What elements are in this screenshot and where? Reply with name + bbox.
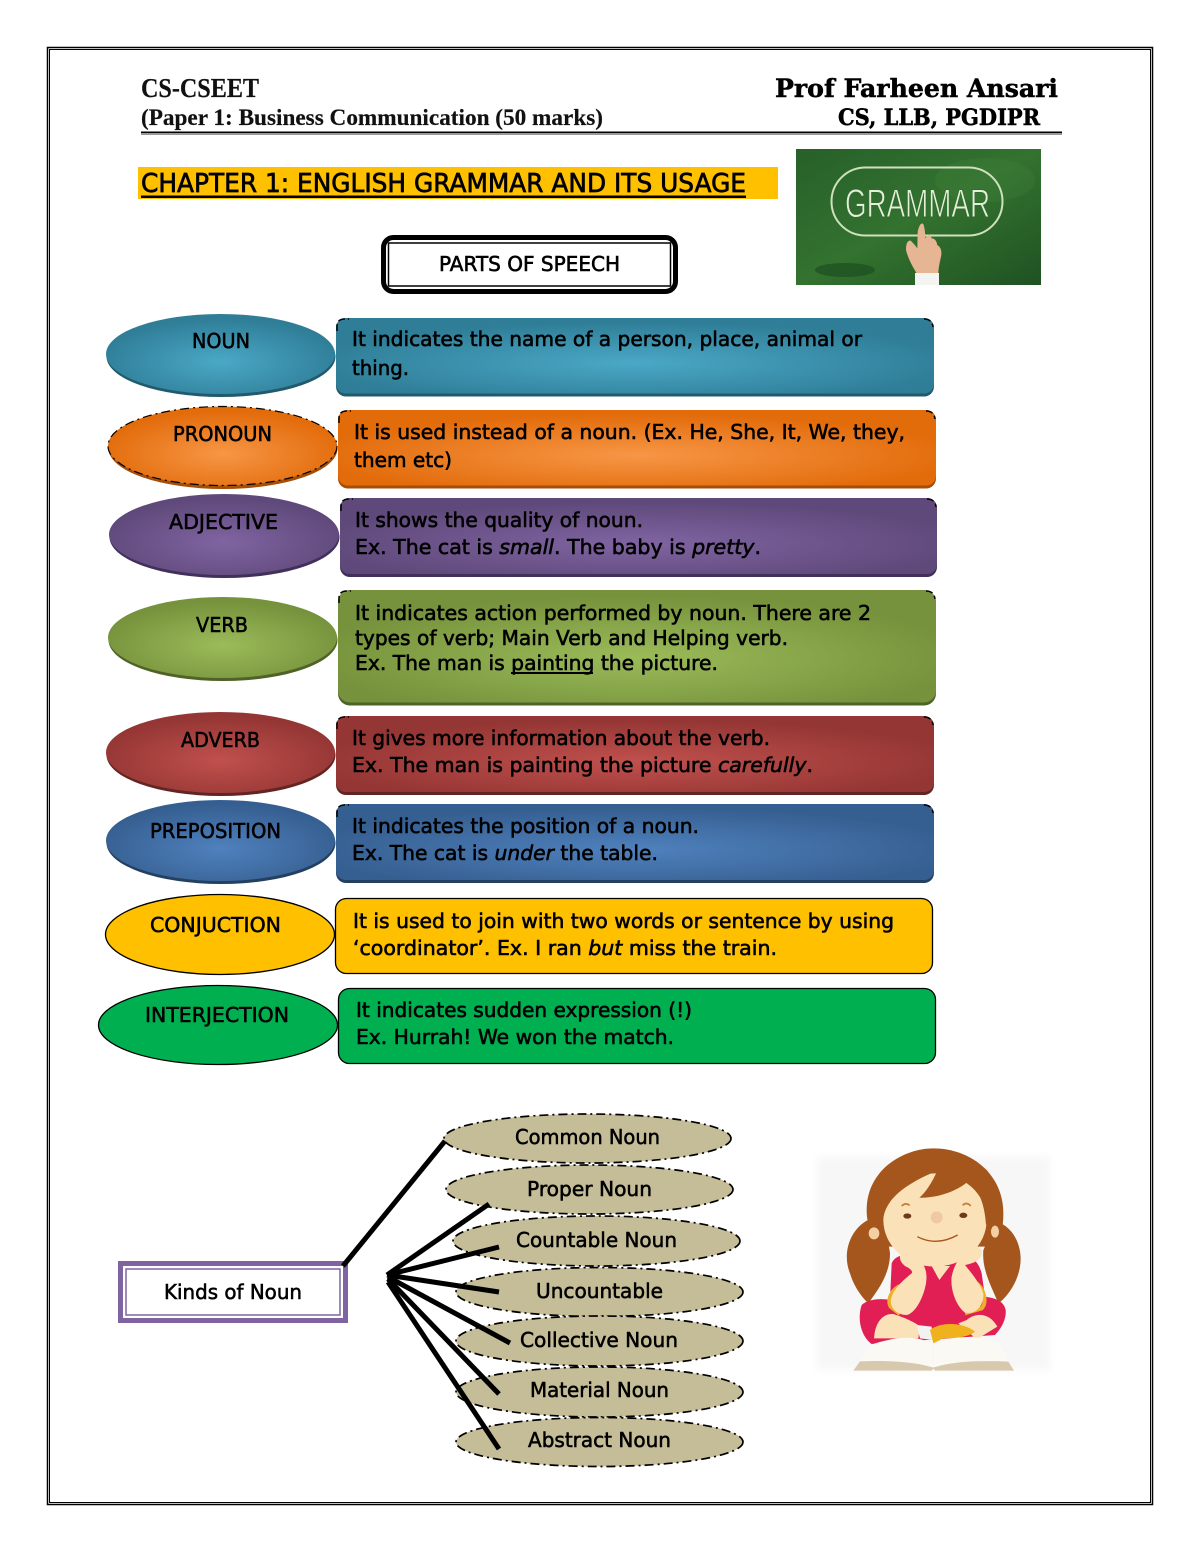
- verb definition: Ex. The man is painting the picture.: [355, 651, 718, 675]
- conjunction ellipse: CONJUCTION: [150, 913, 281, 937]
- adverb definition: It gives more information about the verb.: [352, 726, 770, 750]
- conjunction ellipse: [106, 894, 334, 974]
- adverb definition: [336, 716, 934, 795]
- noun type labels: Material Noun: [530, 1378, 669, 1402]
- noun type labels: Uncountable: [536, 1279, 663, 1303]
- noun type labels: Proper Noun: [527, 1177, 652, 1201]
- noun definition: [336, 318, 934, 396]
- preposition definition: [336, 804, 934, 883]
- noun type labels: Common Noun: [515, 1125, 660, 1149]
- heading: parts of speech: [384, 238, 676, 292]
- adjective ellipse: ADJECTIVE: [169, 510, 278, 534]
- header: course and paper: CS-CSEET: [141, 73, 259, 103]
- interjection definition: It indicates sudden expression (!): [356, 998, 692, 1022]
- box: kinds of noun: [118, 1261, 348, 1323]
- pronoun ellipse: PRONOUN: [173, 422, 272, 446]
- preposition ellipse: PREPOSITION: [150, 819, 281, 843]
- header: author: CS, LLB, PGDIPR: [838, 105, 1041, 131]
- adjective definition: It shows the quality of noun.: [355, 508, 643, 532]
- connector lines: [343, 1141, 510, 1449]
- diagram: kinds of noun: [118, 1114, 743, 1466]
- preposition ellipse: [106, 800, 336, 884]
- noun definition: thing.: [352, 356, 409, 380]
- adjective ellipse: [109, 494, 340, 578]
- adverb definition: Ex. The man is painting the picture carefully.: [352, 753, 813, 777]
- noun ellipse: [106, 314, 336, 397]
- header: author: [775, 74, 1058, 131]
- row: conjunction: [106, 894, 932, 974]
- pronoun ellipse: [108, 406, 338, 489]
- noun type ellipses: [444, 1114, 743, 1466]
- adjective definition: Ex. The cat is small. The baby is pretty.: [355, 535, 761, 559]
- verb ellipse: [108, 597, 338, 681]
- verb definition: It indicates action performed by noun. There are 2: [355, 601, 871, 625]
- chapter title: CHAPTER 1: ENGLISH GRAMMAR AND ITS USAGE: [141, 169, 746, 199]
- header: course and paper: (Paper 1: Business Communication (50 marks): [141, 105, 603, 130]
- row: noun: [106, 314, 934, 397]
- noun type labels: [515, 1125, 678, 1452]
- conjunction definition: [336, 898, 932, 974]
- image: girl reading a book: [817, 1148, 1050, 1371]
- preposition definition: Ex. The cat is under the table.: [352, 841, 658, 865]
- image: grammar chalkboard: GRAMMAR: [845, 182, 990, 226]
- noun type labels: Abstract Noun: [528, 1428, 671, 1452]
- row: verb: [108, 590, 936, 706]
- preposition definition: It indicates the position of a noun.: [352, 814, 699, 838]
- noun type labels: Countable Noun: [516, 1228, 677, 1252]
- interjection definition: Ex. Hurrah! We won the match.: [356, 1025, 674, 1049]
- row: adverb: [106, 712, 934, 796]
- pronoun definition: It is used instead of a noun. (Ex. He, She, It, We, they,: [354, 420, 905, 444]
- heading: parts of speech: PARTS OF SPEECH: [439, 252, 620, 276]
- interjection definition: [338, 988, 936, 1064]
- box: kinds of noun: Kinds of Noun: [164, 1280, 302, 1304]
- pronoun definition: [338, 410, 936, 488]
- pronoun definition: them etc): [354, 448, 452, 472]
- header: course and paper: [141, 73, 603, 130]
- verb ellipse: VERB: [196, 613, 248, 637]
- image: grammar chalkboard: [796, 149, 1041, 285]
- noun definition: It indicates the name of a person, place, animal or: [352, 327, 863, 351]
- header: author: Prof Farheen Ansari: [775, 74, 1058, 103]
- noun type labels: Collective Noun: [520, 1328, 678, 1352]
- conjunction definition: ‘coordinator’. Ex. I ran but miss the train.: [353, 936, 777, 960]
- row: adjective: [109, 494, 937, 578]
- row: interjection: [98, 986, 936, 1064]
- adverb ellipse: ADVERB: [181, 728, 260, 752]
- row: preposition: [106, 800, 934, 884]
- conjunction definition: It is used to join with two words or sentence by using: [353, 909, 894, 933]
- interjection ellipse: INTERJECTION: [145, 1003, 289, 1027]
- interjection ellipse: [98, 986, 338, 1064]
- adverb ellipse: [106, 712, 336, 796]
- verb definition: [338, 590, 936, 706]
- adjective definition: [340, 498, 937, 577]
- row: pronoun: [108, 406, 936, 489]
- verb definition: types of verb; Main Verb and Helping verb.: [355, 626, 788, 650]
- noun ellipse: NOUN: [192, 329, 250, 353]
